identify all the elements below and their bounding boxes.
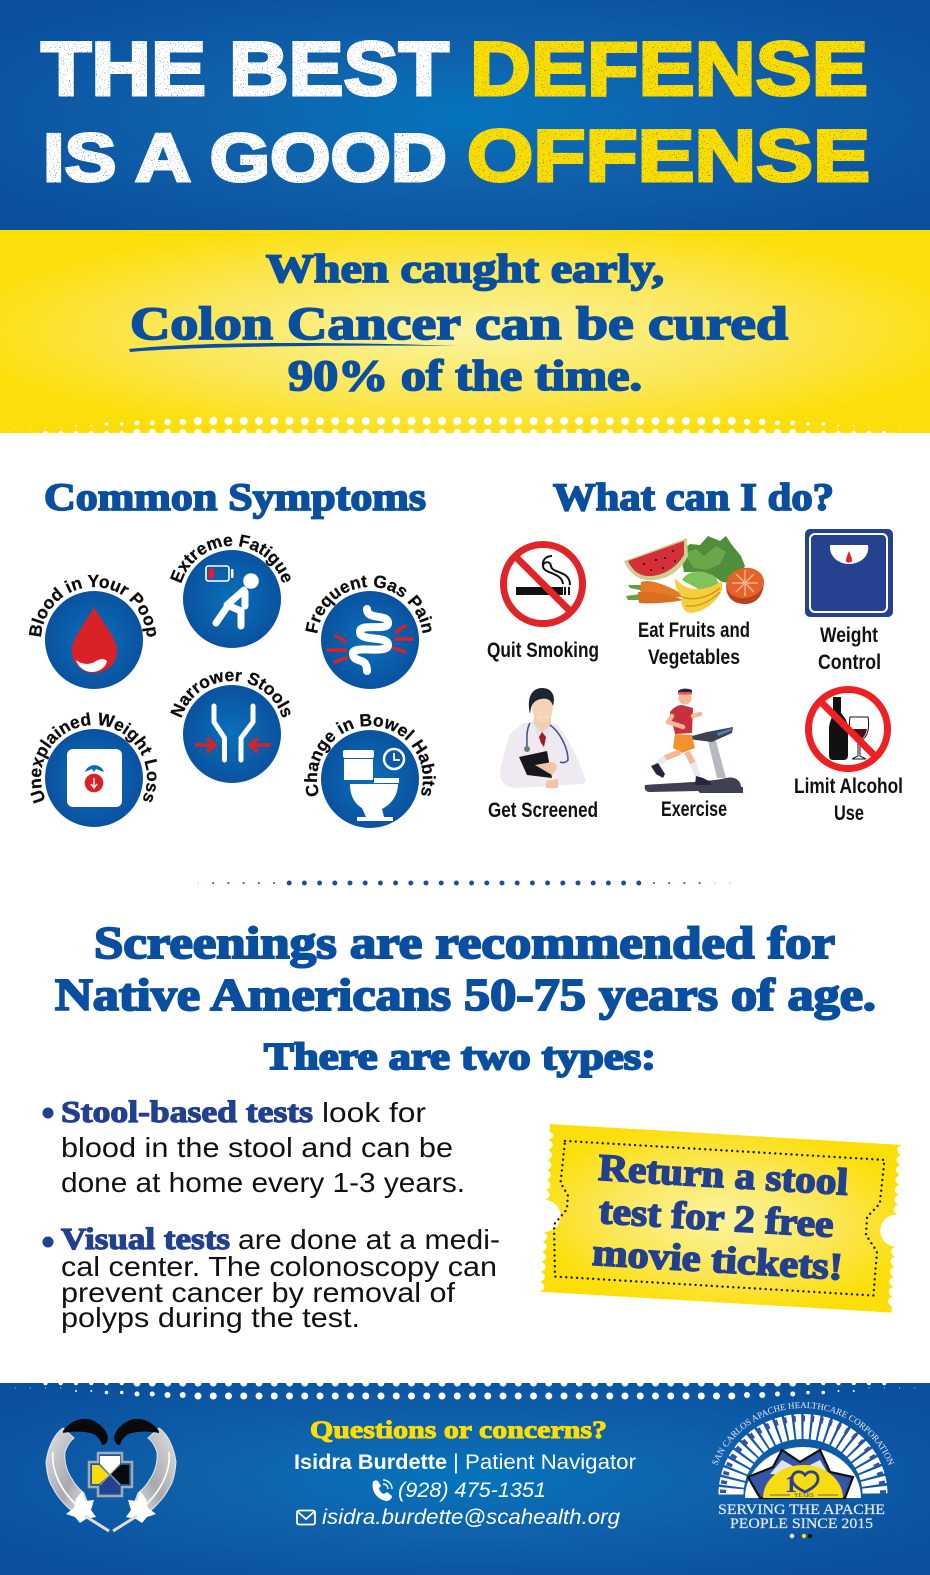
left feather [46,1419,109,1531]
footer contact text: (928) 475-1351 [398,1479,546,1502]
lettuce [680,536,745,583]
action: limit alcohol use: Limit Alcohol [794,775,903,798]
orange [726,580,764,604]
text: when caught early [129,246,788,400]
logo: san carlos apache healthcare corporation: SERVING THE APACHE [718,1502,885,1518]
text: when caught early: 90% of the time. [288,353,642,400]
symptom: frequent gas pain [305,576,432,689]
ticket text: movie tickets! [591,1232,844,1289]
symptom: change in bowel habits [304,714,436,828]
bullet: stool-based tests: look for [322,1097,426,1128]
action: weight control [805,529,893,674]
icon: mail [297,1510,315,1524]
symptom: extreme fatigue: Extreme Fatigue [170,534,290,584]
bullet: stool-based tests [42,1094,465,1198]
symptom: narrower stools: Narrower Stools [170,672,290,718]
action: limit alcohol use [794,690,903,825]
logo: san carlos apache healthcare corporation: SAN CARLOS APACHE HEALTHCARE CORPORATION [712,1402,894,1466]
bullet: stool-based tests: Stool-based tests [61,1094,313,1129]
symptom: change in bowel habits: Change in Bowel Habits [304,714,436,796]
action: eat fruits and vegetables: Eat Fruits and [638,619,750,642]
bullet: stool-based tests: blood in the stool and can be [61,1132,453,1163]
action: weight control: Weight [820,624,878,647]
heading: screenings recommendation: Screenings are recommended for [94,918,835,968]
action: limit alcohol use: Use [834,802,864,825]
action: get screened [488,688,598,822]
green leaf [682,571,722,590]
title: the best defense is a good offense: THE BEST [41,27,449,112]
bananas [675,578,722,613]
icon: phone [373,1480,392,1501]
logo: san carlos apache healthcare corporation: YEARS [794,1493,814,1499]
logo: san carlos apache healthcare corporation: PEOPLE SINCE 2015 [730,1516,873,1532]
text: when caught early: When caught early, [266,246,664,291]
bullet: visual tests: polyps during the test. [61,1302,360,1333]
text: when caught early: can be cured [475,298,788,350]
symptom: extreme fatigue [170,534,290,648]
action: exercise: Exercise [661,798,727,821]
footer contact text: | Patient Navigator [453,1451,636,1474]
bullet: visual tests: Visual tests [61,1221,230,1256]
text: when caught early: Colon Cancer [130,298,461,350]
symptom: blood in your poop: Blood in Your Poop [28,574,156,637]
action: eat fruits and vegetables [624,536,767,669]
panel: yellow cure-rate banner [0,230,930,433]
bullet: stool-based tests: done at home every 1-3 years. [61,1167,465,1198]
symptom: blood in your poop [28,574,156,689]
logo: feather heart [46,1419,176,1531]
title: the best defense is a good offense: DEFENSE [470,27,868,112]
action: quit smoking: Quit Smoking [487,639,599,662]
carrots [626,585,645,600]
heading: screenings recommendation: Native Americans 50-75 years of age. [55,970,876,1020]
ticket text: test for 2 free [598,1190,835,1246]
footer contact text [294,1417,636,1529]
right feather [113,1419,176,1531]
title: the best defense is a good offense [41,27,870,197]
heading: what can i do: What can I do? [553,476,834,519]
footer contact text: isidra.burdette@scahealth.org [322,1506,620,1529]
heading: screenings recommendation: There are two types: [264,1036,656,1078]
footer contact text: Isidra Burdette [294,1451,447,1474]
logo: san carlos apache healthcare corporation [712,1402,894,1538]
bullet: visual tests: are done at a medi- [238,1224,500,1255]
heading: common symptoms: Common Symptoms [44,476,426,519]
panel: footer [0,1383,930,1575]
bullet: visual tests [42,1221,500,1333]
heading: screenings recommendation [55,918,876,1078]
symptom: narrower stools [170,672,290,783]
ticket text [591,1147,849,1289]
symptom: unexplained weight loss: Unexplained Weight Loss [30,712,157,804]
logo: san carlos apache healthcare corporation: 1 [785,1472,797,1498]
panel: title banner [0,0,930,230]
symptom: frequent gas pain: Frequent Gas Pain [305,576,432,634]
watermelon [624,538,688,580]
bullet: visual tests: prevent cancer by removal of [61,1277,455,1308]
title: the best defense is a good offense: IS A GOOD [43,120,447,196]
cross emblem [89,1453,132,1496]
action: quit smoking [487,544,599,662]
action: get screened: Get Screened [488,799,598,822]
bullet: visual tests: cal center. The colonoscopy can [61,1251,497,1282]
footer contact text: Questions or concerns? [310,1417,607,1444]
callout: movie ticket [540,1124,901,1313]
action: weight control: Control [818,651,881,674]
action: exercise [645,689,743,821]
title: the best defense is a good offense: OFFENSE [467,116,870,197]
action: eat fruits and vegetables: Vegetables [648,646,740,669]
ticket text: Return a stool [597,1147,849,1204]
